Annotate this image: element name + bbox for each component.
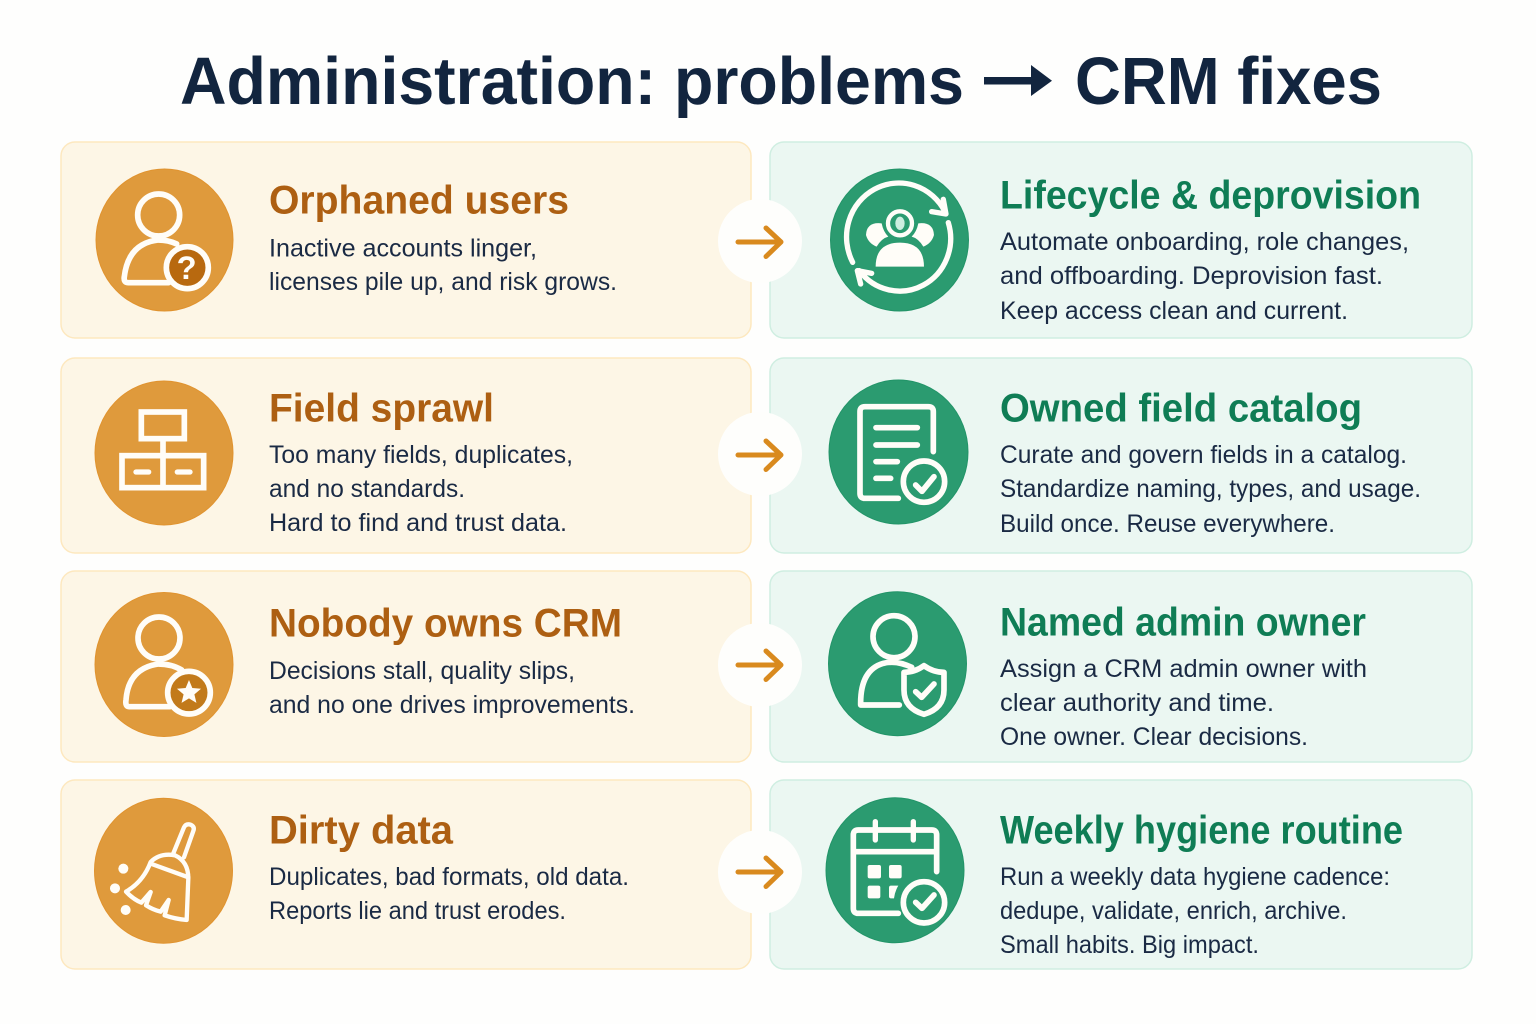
heading: Named admin owner (1000, 600, 1366, 644)
description: dedupe, validate, enrich, archive. (1000, 897, 1347, 925)
arrow: row 4 (718, 830, 802, 914)
panel: Dirty data (61, 780, 751, 969)
panel: Named admin owner (770, 571, 1472, 762)
arrow: row 2 (718, 412, 802, 496)
heading: Orphaned users (269, 178, 569, 222)
description (269, 234, 617, 296)
description: and no one drives improvements. (269, 691, 635, 719)
description: Assign a CRM admin owner with (1000, 655, 1367, 683)
heading: Weekly hygiene routine (1000, 808, 1403, 852)
description: Small habits. Big impact. (1000, 931, 1259, 959)
heading: Owned field catalog (1000, 386, 1362, 430)
description: Build once. Reuse everywhere. (1000, 510, 1335, 538)
title: Administration: problems (180, 44, 964, 119)
description: Reports lie and trust erodes. (269, 897, 566, 925)
icon: broom (94, 798, 232, 943)
description: and no standards. (269, 475, 465, 503)
description (269, 863, 629, 925)
icon: calendar with check (826, 798, 964, 943)
description: Inactive accounts linger, (269, 234, 537, 262)
icon: field hierarchy (95, 381, 233, 525)
heading: Lifecycle & deprovision (1000, 174, 1421, 218)
description: clear authority and time. (1000, 689, 1274, 717)
arrow: row 3 (718, 623, 802, 707)
icon: user with question mark (96, 169, 233, 311)
icon: lifecycle arrows around users (830, 169, 968, 311)
heading: Nobody owns CRM (269, 602, 622, 646)
description: Duplicates, bad formats, old data. (269, 863, 629, 891)
panel: Owned field catalog (770, 358, 1472, 553)
description: Automate onboarding, role changes, (1000, 228, 1409, 256)
description: Too many fields, duplicates, (269, 441, 573, 469)
description: Hard to find and trust data. (269, 509, 567, 537)
description: One owner. Clear decisions. (1000, 723, 1308, 751)
description (1000, 655, 1367, 751)
description (1000, 441, 1421, 538)
panel: Lifecycle and deprovision (770, 142, 1472, 338)
description: Run a weekly data hygiene cadence: (1000, 863, 1390, 891)
heading: Dirty data (269, 808, 454, 852)
title (180, 44, 1382, 119)
heading: Field sprawl (269, 386, 494, 430)
panel: Weekly hygiene routine (770, 780, 1472, 969)
description (269, 441, 573, 537)
panel: Field sprawl (61, 358, 751, 553)
panel: Orphaned users (61, 142, 751, 338)
description (1000, 863, 1390, 959)
icon: document with check (829, 380, 968, 524)
description (269, 657, 635, 719)
icon: user with shield (828, 592, 966, 736)
description: licenses pile up, and risk grows. (269, 268, 617, 296)
description: Keep access clean and current. (1000, 297, 1348, 325)
title: CRM fixes (1075, 44, 1382, 119)
description: Standardize naming, types, and usage. (1000, 475, 1421, 503)
description (1000, 228, 1409, 325)
icon: user with question mark: ? (177, 249, 197, 286)
description: Decisions stall, quality slips, (269, 657, 575, 685)
description: and offboarding. Deprovision fast. (1000, 262, 1383, 290)
description: Curate and govern fields in a catalog. (1000, 441, 1407, 469)
icon: user with star (95, 592, 233, 736)
arrow: row 1 (718, 199, 802, 283)
panel: Nobody owns CRM (61, 571, 751, 762)
